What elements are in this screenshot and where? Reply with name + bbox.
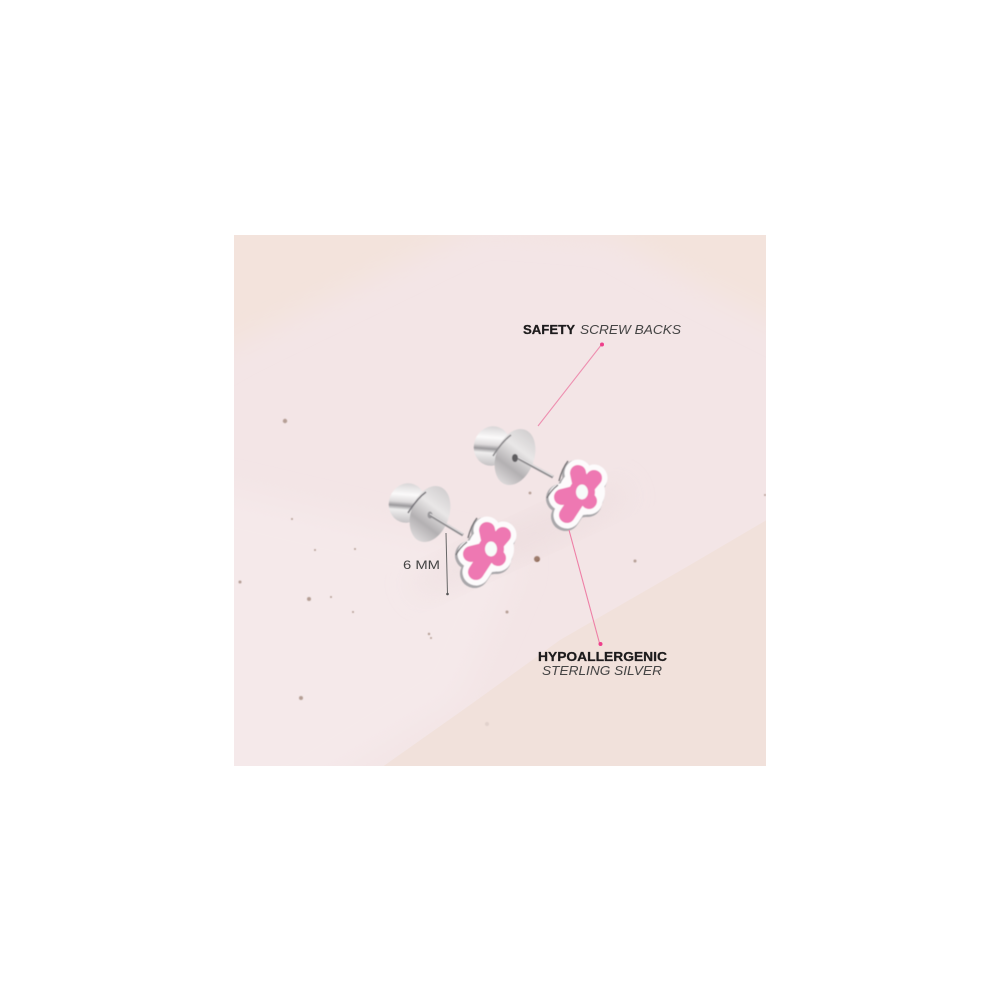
background: lower beige surface: [378, 518, 770, 770]
earring: back right stud: [468, 421, 605, 518]
post: [518, 458, 553, 477]
callout label: hypoallergenic: HYPOALLERGENIC: [538, 650, 667, 664]
dimension line: [446, 533, 448, 594]
leader dot: [600, 342, 604, 346]
earring: front left stud: [383, 478, 514, 574]
arrow: leader line from flower: [569, 530, 600, 645]
background: beige upper surface: [234, 235, 766, 332]
panel: photo background: [234, 235, 766, 766]
screw back: [468, 421, 543, 491]
flower face: [547, 461, 605, 518]
background: specks on the surface: [238, 419, 766, 726]
disc: [402, 480, 458, 548]
screw back: [383, 478, 458, 548]
dome: [383, 478, 431, 528]
background: lighter lower-left surface: [180, 480, 520, 800]
callout label: sterling silver: STERLING SILVER: [542, 664, 662, 678]
dome: [468, 421, 516, 471]
background: soft shadow under earrings: [534, 556, 540, 562]
leader dot: [598, 642, 602, 646]
disc: [487, 423, 543, 491]
callout: hypoallergenic sterling silver: [538, 530, 667, 678]
callout label italic: screw backs: SCREW BACKS: [580, 323, 682, 337]
size label: 6 MM: [403, 558, 440, 572]
post: [430, 515, 463, 535]
arrow: leader line to screw back: [538, 344, 602, 426]
callout label: safety: SAFETY: [523, 323, 576, 337]
dimension end dot: [446, 593, 449, 595]
flower face: [456, 518, 514, 574]
earrings photo layer: [383, 421, 605, 574]
infographic: product photo with callouts: [234, 235, 766, 766]
callout: safety screw backs: [523, 323, 682, 426]
callout: 6 mm size: [403, 533, 449, 595]
